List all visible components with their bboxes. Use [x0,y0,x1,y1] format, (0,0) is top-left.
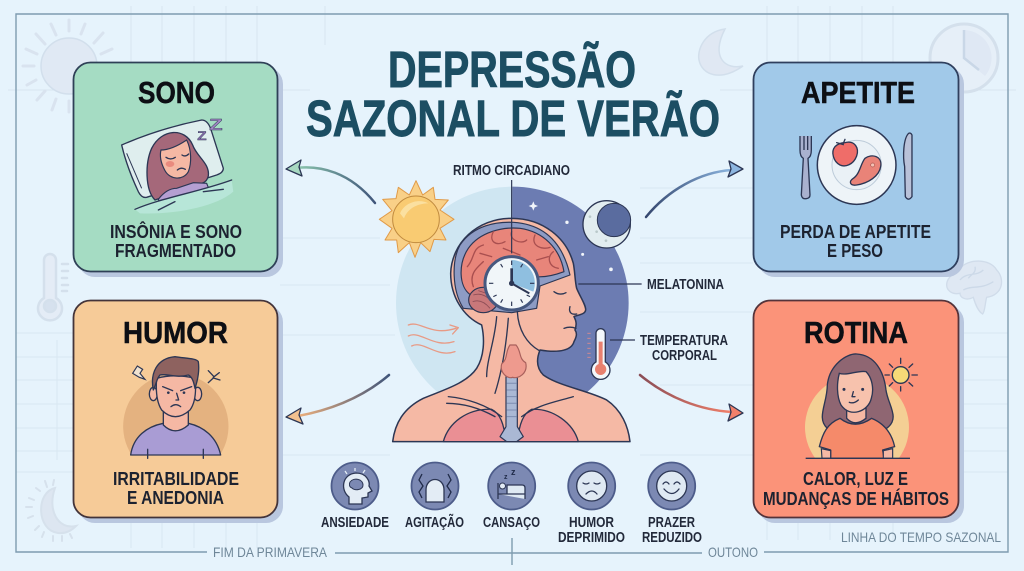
cerebellum [469,287,498,313]
icon: irritated man [123,357,228,458]
panel: sono [74,62,283,277]
background icon: moon and rays [26,480,76,541]
icon: sun [379,181,454,257]
text: humor: IRRITABILIDADE [113,469,239,489]
body and head [393,218,630,442]
symptom: cansaço [483,462,540,531]
label: temperatura corporal: TEMPERATURA [640,333,728,349]
icon: moon [583,201,631,248]
text: rotina: MUDANÇAS DE HÁBITOS [763,488,949,509]
skull band [454,222,570,313]
text: humor [113,469,239,508]
label: ritmo circadiano: RITMO CIRCADIANO [453,163,570,179]
lungs [443,409,578,442]
symptom: humor deprimido [558,462,625,546]
text: sono: INSÔNIA E SONO [110,221,242,242]
background icon: sun [23,20,112,112]
icon: stars [529,201,613,271]
thyroid [501,345,526,378]
text: humor: E ANEDONIA [127,488,224,508]
symptom: prazer reduzido [642,462,702,546]
icon: woman with sun [805,354,917,458]
heading: apetite: APETITE [801,75,915,110]
title: SAZONAL DE VERÃO [306,89,720,147]
icon: plate with food [800,126,912,204]
heading: sono: SONO [138,75,215,110]
symptom: prazer reduzido: REDUZIDO [642,530,702,546]
timeline [213,529,1001,565]
label: outono: OUTONO [708,544,758,560]
leader lines [512,180,642,340]
arrow: to humor [286,375,389,424]
brain [461,228,564,295]
facial features [487,292,577,393]
background icon: brain [947,261,1002,314]
text: apetite: PERDA DE APETITE [780,222,931,242]
icon: woman sleeping [122,117,233,214]
icon: woman sleeping: Z [197,129,207,143]
label: linha do tempo sazonal: LINHA DO TEMPO SAZONAL [841,529,1001,545]
symptom: ansiedade: ANSIEDADE [321,515,389,531]
panel: rotina [754,300,964,523]
icon: woman sleeping: Z [209,117,223,134]
symptom: humor deprimido: HUMOR [569,515,614,531]
arrow: to sono [286,160,375,203]
text: apetite: E PESO [827,241,883,261]
title: DEPRESSÃO [388,40,636,98]
text: apetite [780,222,931,261]
clock [485,257,538,310]
text: sono: FRAGMENTADO [115,241,236,261]
label: temperatura corporal [640,333,728,364]
symptom: cansaço: z [511,467,516,477]
icon: heat waves [408,324,458,353]
background icon: crescent moon [699,29,743,75]
heading: rotina: ROTINA [804,315,908,350]
symptom: agitação: AGITAÇÃO [405,513,464,531]
symptom: cansaço: z [504,474,508,481]
heading: humor: HUMOR [123,315,228,350]
day night disc [396,187,629,419]
symptom: agitação [405,462,464,531]
text: rotina [763,469,949,509]
symptom: humor deprimido: DEPRIMIDO [558,530,625,546]
trachea [500,377,523,442]
arrow: to apetite [646,161,743,217]
symptom: prazer reduzido: PRAZER [648,515,695,531]
panel: humor [74,300,283,523]
text: rotina: CALOR, LUZ E [803,469,908,489]
label: fim da primavera: FIM DA PRIMAVERA [213,544,328,560]
background icon: thermometer [38,254,68,320]
background icon: clock [930,24,998,92]
label: temperatura corporal: CORPORAL [652,348,717,364]
panel: apetite [754,62,964,277]
symptom: ansiedade [321,462,389,531]
text: sono [110,221,242,261]
icon: thermometer [587,329,610,379]
title [306,40,720,147]
central illustration: head with circadian clock [379,180,642,442]
symptom: cansaço: CANSAÇO [483,515,540,531]
arrow: to rotina [640,375,743,421]
label: melatonina: MELATONINA [647,277,724,293]
